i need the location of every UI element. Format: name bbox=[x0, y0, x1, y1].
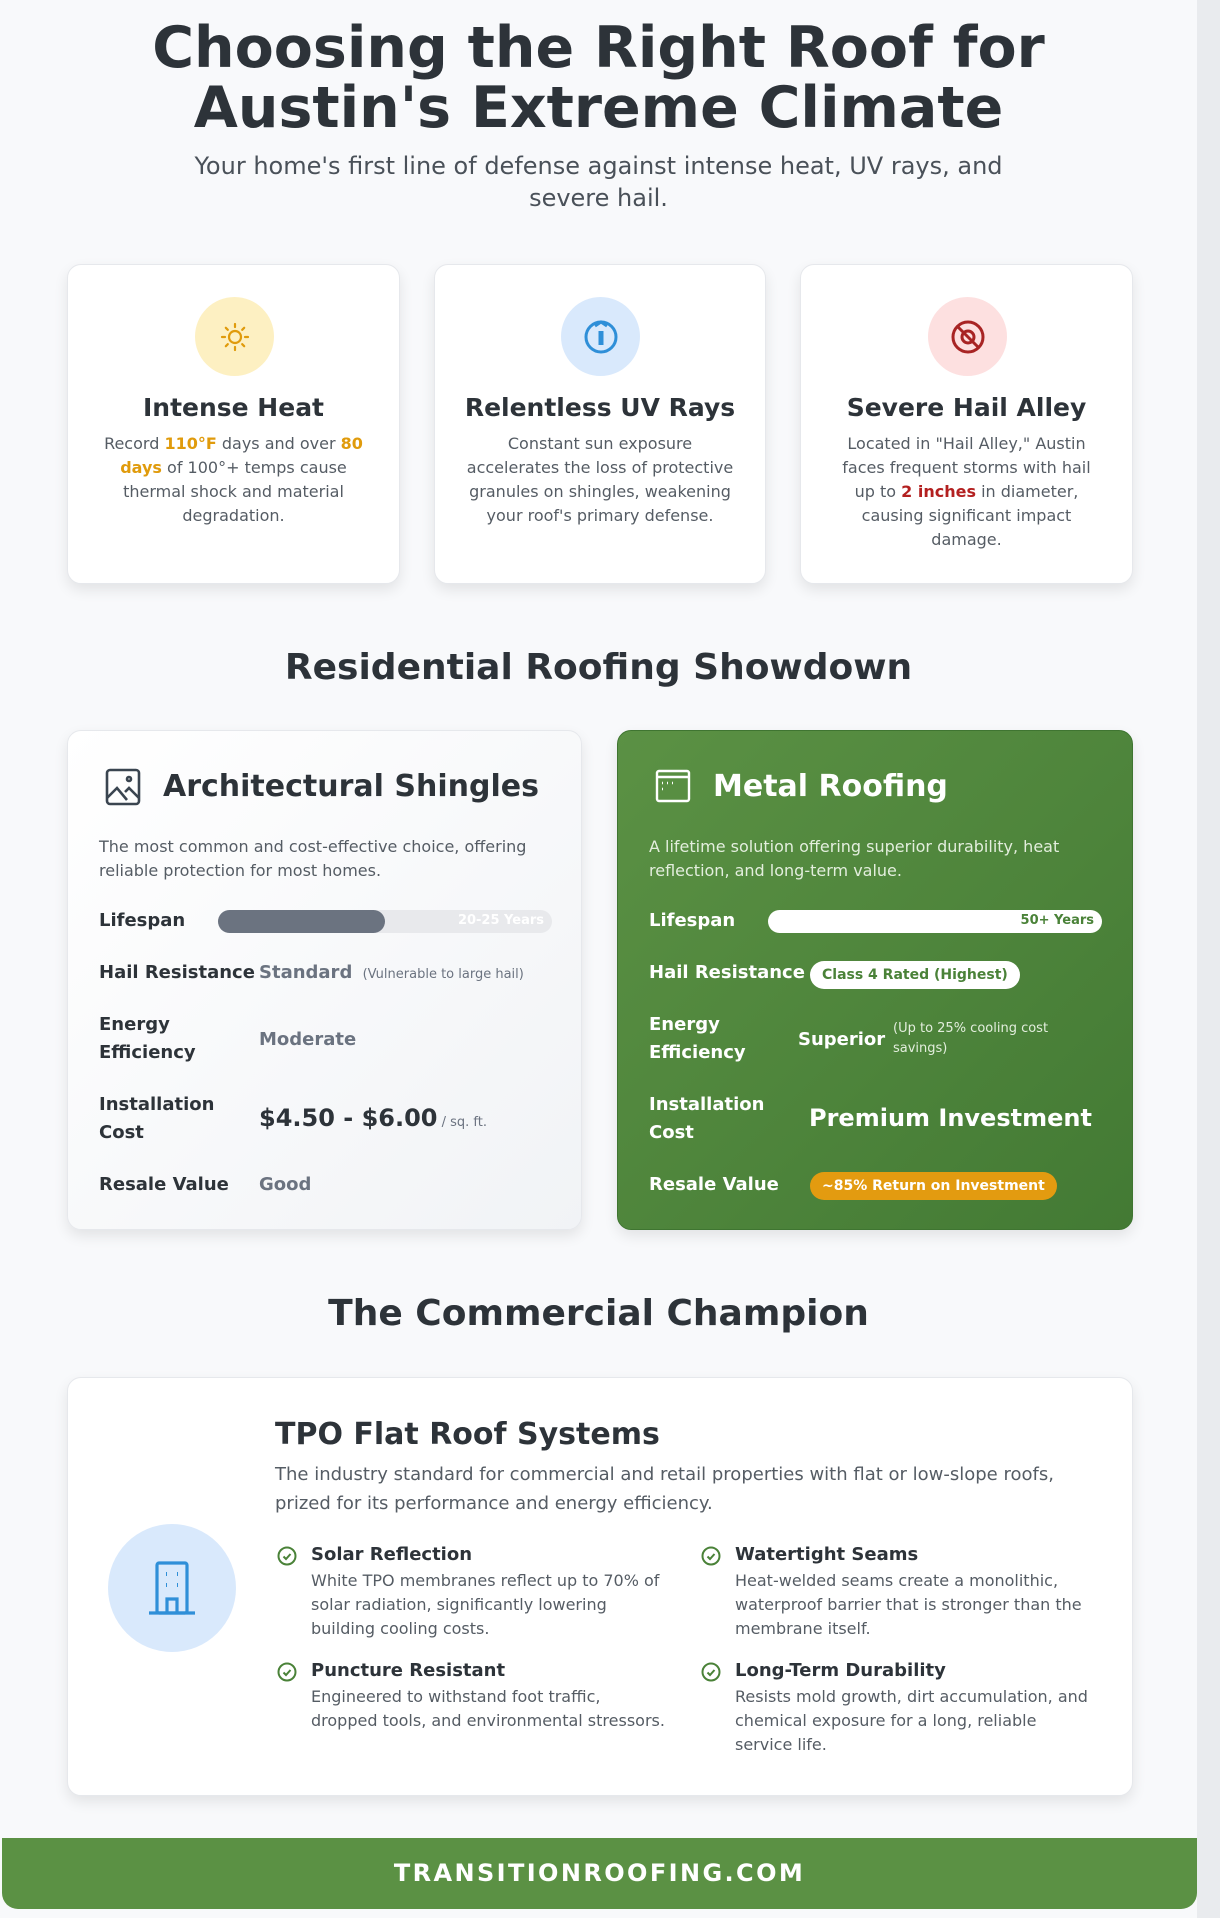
row: resale: Resale Value bbox=[649, 1174, 779, 1195]
feature: watertight bbox=[702, 1544, 1082, 1638]
heading: Relentless UV Rays bbox=[465, 393, 735, 422]
heading: residential: Residential Roofing Showdown bbox=[285, 647, 912, 688]
feature: durability bbox=[702, 1660, 1088, 1754]
feature: puncture: Puncture Resistant bbox=[311, 1660, 505, 1681]
heading: Metal Roofing bbox=[713, 769, 948, 804]
row: cost: Installation Cost bbox=[649, 1094, 764, 1143]
feature: puncture: Engineered to withstand foot traffic, dropped tools, and environmental stressors. bbox=[311, 1687, 665, 1730]
panel: metal roofing: Premium Investment bbox=[809, 1104, 1092, 1132]
panel: metal roofing: 50+ Years bbox=[1021, 913, 1094, 928]
title: Choosing the Right Roof for bbox=[152, 15, 1045, 81]
row: hail: Hail Resistance bbox=[99, 962, 255, 983]
icon: sun bbox=[195, 297, 274, 376]
text: Located in "Hail Alley," Austin faces frequent storms with hail up to 2 inches in diameter, causing significant impact damage. bbox=[842, 434, 1091, 549]
title bbox=[152, 15, 1045, 141]
panel: metal roofing: ~85% Return on Investment bbox=[822, 1178, 1045, 1194]
panel: architectural shingles: Good bbox=[259, 1174, 311, 1195]
feature: durability: Long-Term Durability bbox=[735, 1660, 946, 1681]
panel: architectural shingles: Standard (Vulnerable to large hail) bbox=[259, 962, 524, 983]
row: lifespan: Lifespan bbox=[99, 910, 185, 931]
heading: TPO Flat Roof Systems bbox=[275, 1417, 660, 1452]
panel: architectural shingles: 20-25 Years bbox=[458, 913, 544, 928]
panel: metal roofing bbox=[617, 730, 1133, 1230]
panel: metal roofing: Superior bbox=[798, 1029, 885, 1050]
feature: solar: Solar Reflection bbox=[311, 1544, 472, 1565]
row: energy: Energy Efficiency bbox=[99, 1014, 196, 1063]
heading: commercial: The Commercial Champion bbox=[328, 1293, 869, 1334]
text: Record 110°F days and over 80 days of 100°+ temps cause thermal shock and material degradation. bbox=[104, 434, 363, 525]
row: cost: Installation Cost bbox=[99, 1094, 214, 1143]
description: The most common and cost-effective choice, offering reliable protection for most homes. bbox=[99, 837, 526, 880]
icon: building bbox=[108, 1524, 236, 1652]
heading: Intense Heat bbox=[143, 393, 324, 422]
subtitle: Your home's first line of defense against intense heat, UV rays, and severe hail. bbox=[194, 152, 1003, 212]
row: hail: Hail Resistance bbox=[649, 962, 805, 983]
feature: watertight: Heat-welded seams create a monolithic, waterproof barrier that is stronger than the membrane itself. bbox=[735, 1571, 1082, 1638]
row: energy: Energy Efficiency bbox=[649, 1014, 746, 1063]
text: Constant sun exposure accelerates the loss of protective granules on shingles, weakening your roof's primary defense. bbox=[467, 434, 733, 525]
feature: durability: Resists mold growth, dirt accumulation, and chemical exposure for a long, reliable service life. bbox=[735, 1687, 1088, 1754]
footer bbox=[2, 1838, 1197, 1909]
row: resale: Resale Value bbox=[99, 1174, 229, 1195]
panel: architectural shingles: Moderate bbox=[259, 1029, 356, 1050]
panel: hail bbox=[800, 264, 1133, 584]
title: Austin's Extreme Climate bbox=[194, 75, 1003, 141]
icon: hail bbox=[928, 297, 1007, 376]
panel: architectural shingles: $4.50 - $6.00 / sq. ft. bbox=[259, 1104, 487, 1132]
feature: solar bbox=[278, 1544, 660, 1638]
feature: puncture bbox=[278, 1660, 665, 1730]
description: The industry standard for commercial and retail properties with flat or low-slope roofs, prized for its performance and energy efficiency. bbox=[275, 1464, 1054, 1514]
description: A lifetime solution offering superior durability, heat reflection, and long-term value. bbox=[649, 837, 1059, 880]
panel: metal roofing: Class 4 Rated (Highest) bbox=[822, 967, 1008, 983]
icon: image bbox=[106, 768, 140, 806]
row: lifespan: Lifespan bbox=[649, 910, 735, 931]
panel: intense heat bbox=[67, 264, 400, 584]
icon: panel bbox=[656, 770, 690, 802]
heading: Architectural Shingles bbox=[163, 769, 539, 804]
heading: Severe Hail Alley bbox=[847, 393, 1086, 422]
panel: architectural shingles bbox=[67, 730, 582, 1230]
icon: uv bbox=[561, 297, 640, 376]
footer: TRANSITIONROOFING.COM bbox=[394, 1859, 805, 1887]
panel: TPO bbox=[67, 1377, 1133, 1796]
feature: solar: White TPO membranes reflect up to 70% of solar radiation, significantly lowering building cooling costs. bbox=[311, 1571, 659, 1638]
panel: uv rays bbox=[434, 264, 766, 584]
panel: metal roofing: (Up to 25% cooling cost savings) bbox=[893, 1021, 1048, 1056]
feature: watertight: Watertight Seams bbox=[735, 1544, 918, 1565]
